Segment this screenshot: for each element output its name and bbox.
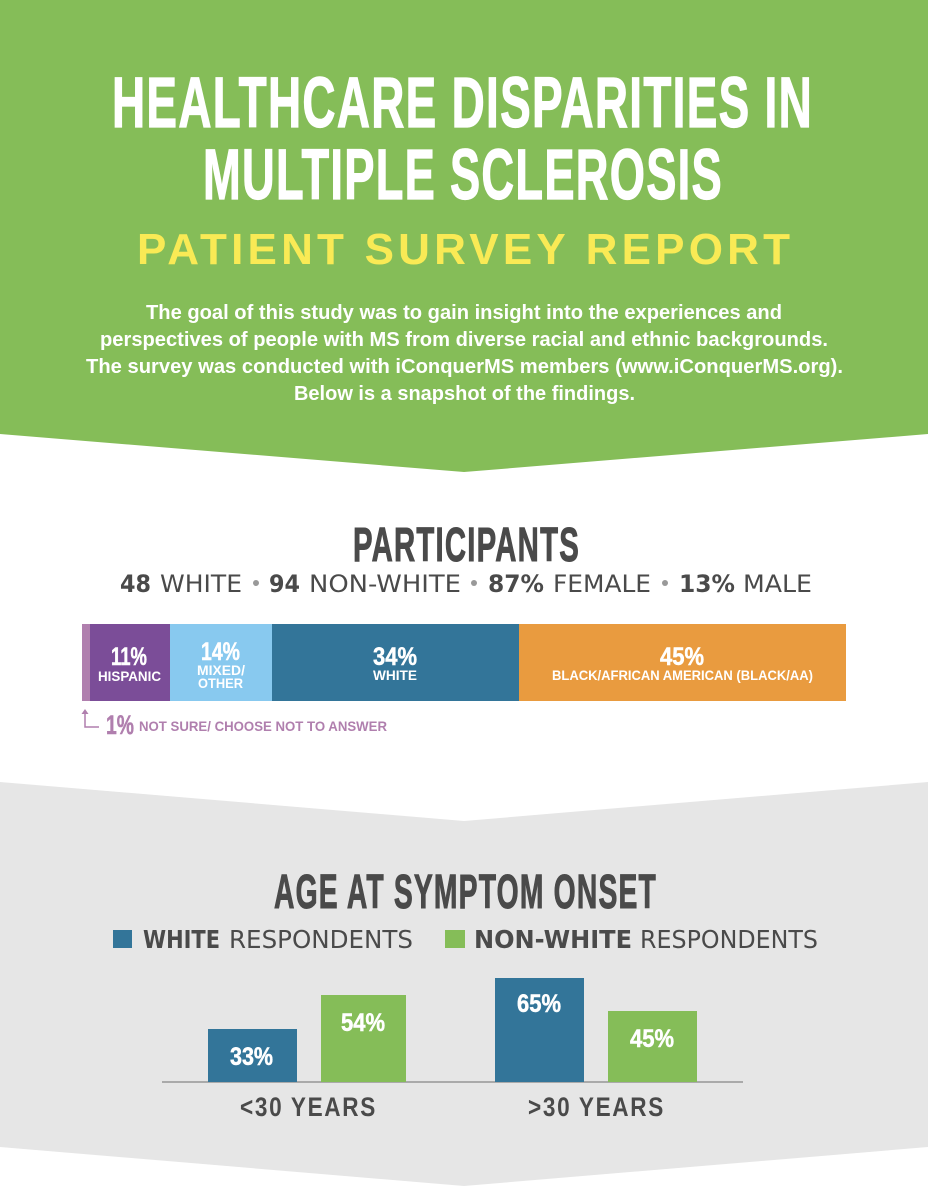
callout: not sure: NOT SURE/ CHOOSE NOT TO ANSWER [139,718,387,734]
legend: WHITE [143,925,220,954]
bar: white over 30 [495,978,584,1082]
heading: age at symptom onset: AGE AT SYMPTOM ONSET [274,866,657,919]
intro text: Below is a snapshot of the findings. [294,383,635,405]
legend: RESPONDENTS [229,925,413,954]
title [112,64,813,215]
participant summary: 13% [679,570,735,598]
legend: RESPONDENTS [640,925,818,954]
legend: NON-WHITE [474,925,632,954]
callout: not sure [82,709,387,740]
intro text: The survey was conducted with iConquerMS members (www.iConquerMS.org). [86,356,843,378]
callout: not sure: 1% [106,710,134,740]
intro text: perspectives of people with MS from diverse racial and ethnic backgrounds. [100,329,828,351]
panel: header [0,0,928,472]
bar: white under 30: 33% [230,1043,273,1071]
participant summary: 94 [269,570,300,598]
participant summary: 48 [120,570,151,598]
segment: mixed/other: MIXED/ [197,663,245,678]
segment: hispanic: HISPANIC [98,669,161,684]
participant summary [120,570,812,598]
axis label: under 30: <30 YEARS [240,1092,377,1122]
participant summary: WHITE [160,570,242,598]
segment: hispanic [90,624,170,701]
bar: white over 30: 65% [517,990,561,1018]
participant summary: MALE [743,570,812,598]
panel: age at symptom onset [0,782,928,1186]
segment: black/african american: BLACK/AFRICAN AMERICAN (BLACK/AA) [552,668,813,683]
bar chart [162,978,743,1122]
segment: mixed/other: 14% [201,638,240,666]
bar: non-white under 30 [321,995,406,1082]
segment: mixed/other: OTHER [198,676,243,691]
panel: participants [82,519,846,740]
segment: black/african american: 45% [660,643,704,671]
segment: white [272,624,519,701]
intro text: The goal of this study was to gain insight into the experiences and [146,302,782,324]
participant summary: 87% [488,570,544,598]
segment: white: 34% [373,643,417,671]
bar: white under 30 [208,1029,297,1082]
participant summary: FEMALE [553,570,651,598]
intro text [86,302,843,405]
axis label: over 30: >30 YEARS [528,1092,665,1122]
stacked bar chart [82,624,846,701]
segment: hispanic: 11% [111,643,147,671]
segment: white: WHITE [373,668,417,683]
legend [113,925,818,954]
subtitle: PATIENT SURVEY REPORT [137,225,790,274]
participant summary: NON-WHITE [309,570,461,598]
heading: participants: PARTICIPANTS [353,519,580,572]
bar: non-white over 30: 45% [630,1025,674,1053]
bar: non-white over 30 [608,1011,697,1082]
segment: black/african american [519,624,846,701]
bar: non-white under 30: 54% [341,1009,385,1037]
segment: mixed/other [170,624,272,701]
